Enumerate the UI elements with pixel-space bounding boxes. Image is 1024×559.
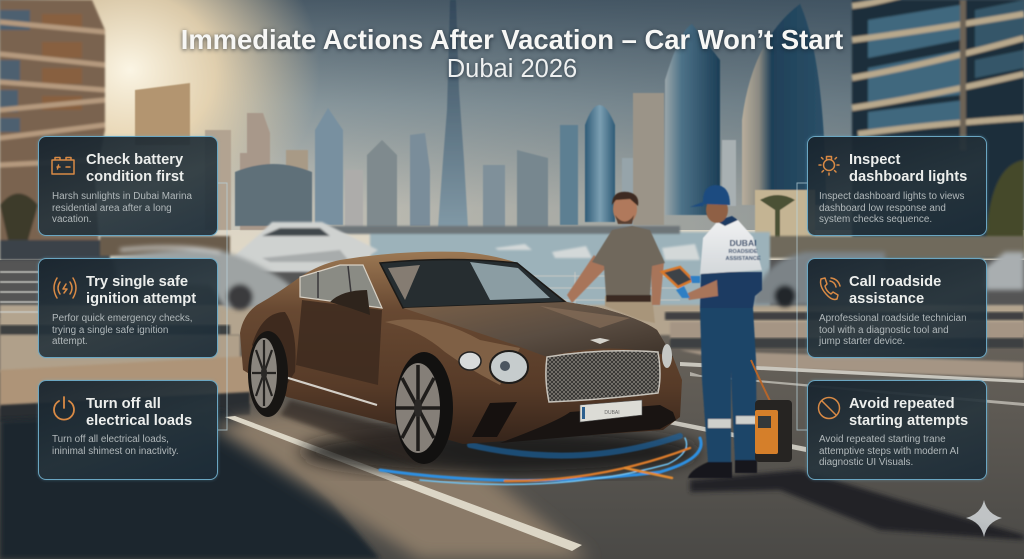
description: attempt. [52,336,88,347]
rear wheel [248,331,288,417]
description: Avoid repeated starting trane [819,434,946,445]
sparkle watermark [966,500,1002,537]
car body [240,252,682,444]
car ground shadow [280,400,700,476]
jump starter device [751,360,792,462]
head [706,197,728,223]
description [819,434,959,468]
lower bumper [500,405,676,443]
grille [546,351,660,402]
front fender shine [385,319,520,385]
heading: Avoid repeated [849,396,955,412]
railing [0,272,680,312]
description: ininimal shimest on inactivity. [52,446,179,456]
roadside technician: ASSISTANCE [725,256,761,262]
description: trying a single safe ignition [52,324,168,336]
description: diagnostic UI Visuals. [819,457,913,468]
roadside technician [662,185,762,478]
description [52,313,193,347]
heading [86,152,184,184]
shirt lettering: DUBAI [730,238,756,248]
marina water [300,226,770,310]
icon: power [53,396,75,420]
description [52,434,179,456]
heading: dashboard lights [849,168,967,184]
icon: phone [820,277,841,300]
icon: warning lamp [818,156,840,176]
hood [403,302,673,357]
panel: call roadside assistance [807,258,987,358]
heading: Try single safe [86,274,188,290]
description: dashboard low response and [819,202,946,214]
description: Turn off all electrical loads, [52,434,169,445]
rear fender shadow [252,312,296,392]
head [613,194,637,224]
heading: Inspect [849,152,900,168]
sill trim [285,377,377,405]
description: jump starter device. [819,336,905,347]
icon: battery [51,156,75,175]
door panel [296,300,382,385]
description: attemptive steps with modern AI [819,446,959,456]
icon: prohibited [818,396,840,420]
licence plate: DUBAI [604,410,620,416]
mirror [330,290,370,315]
description [52,191,192,225]
title block: Immediate Actions After Vacation – Car Won’t Start [181,24,843,55]
heading [849,396,968,428]
description: vacation. [52,214,92,225]
heading: Check battery [86,152,183,168]
reflective stripes [708,416,757,428]
background car right [752,252,1024,307]
luxury brown coupe [240,252,682,464]
description: residential area after a long [52,202,172,214]
hood reflection [540,306,630,328]
white shirt [700,219,762,274]
title block: Dubai 2026 [447,55,577,83]
gloves [676,276,700,298]
panel: check battery condition first [38,136,218,236]
collar [716,216,738,226]
belt [606,295,651,302]
heading: Call roadside [849,274,941,290]
title block [179,24,844,83]
heading: condition first [86,168,184,184]
heading [86,396,192,428]
heading: ignition attempt [86,290,196,306]
panel: try single safe ignition attempt [38,258,218,358]
left residential tower [0,0,110,260]
yacht [232,222,700,272]
thin UI frame lines [218,183,807,430]
heading [849,274,941,306]
trousers [700,308,757,462]
heading: Turn off all [86,396,161,412]
panel: turn off all electrical loads [38,380,218,480]
right residential tower [852,0,1024,258]
description: Perfor quick emergency checks, [52,313,193,324]
car owner [567,192,665,323]
description [818,313,967,347]
sky [0,0,1024,260]
ground and road [0,305,1024,559]
panel: inspect dashboard lights [807,136,987,236]
blue diagnostic floor ring [380,436,701,484]
licence plate [580,400,642,422]
heading: starting attempts [849,412,968,428]
background car left [112,247,290,310]
heading [86,274,196,306]
side windows [300,265,382,308]
badge [590,338,610,344]
waterfront colonnade [100,236,1024,258]
description: Harsh sunlights in Dubai Marina [52,191,192,202]
heading: assistance [849,290,924,306]
heading: electrical loads [86,412,192,428]
description: Aprofessional roadside technician [819,313,967,324]
navy torso [700,272,762,308]
trousers [605,296,655,323]
headlights [459,344,672,383]
description: system checks sequence. [819,214,932,225]
windscreen [380,260,565,308]
icon: ignition signal [53,277,77,299]
tablet [662,267,693,287]
city skyline [135,0,826,240]
polo shirt [592,226,665,296]
forearm [686,280,718,300]
description: tool with a diagnostic tool and [819,324,949,336]
cap [690,185,730,207]
roadside technician: ROADSIDE [728,249,758,255]
panel: avoid repeated starting attempts [807,380,987,480]
heading [849,152,967,184]
front wheel [395,352,453,464]
description: Inspect dashboard lights to views [819,191,964,202]
boots [688,460,757,478]
arms [567,255,664,305]
description [819,191,964,225]
